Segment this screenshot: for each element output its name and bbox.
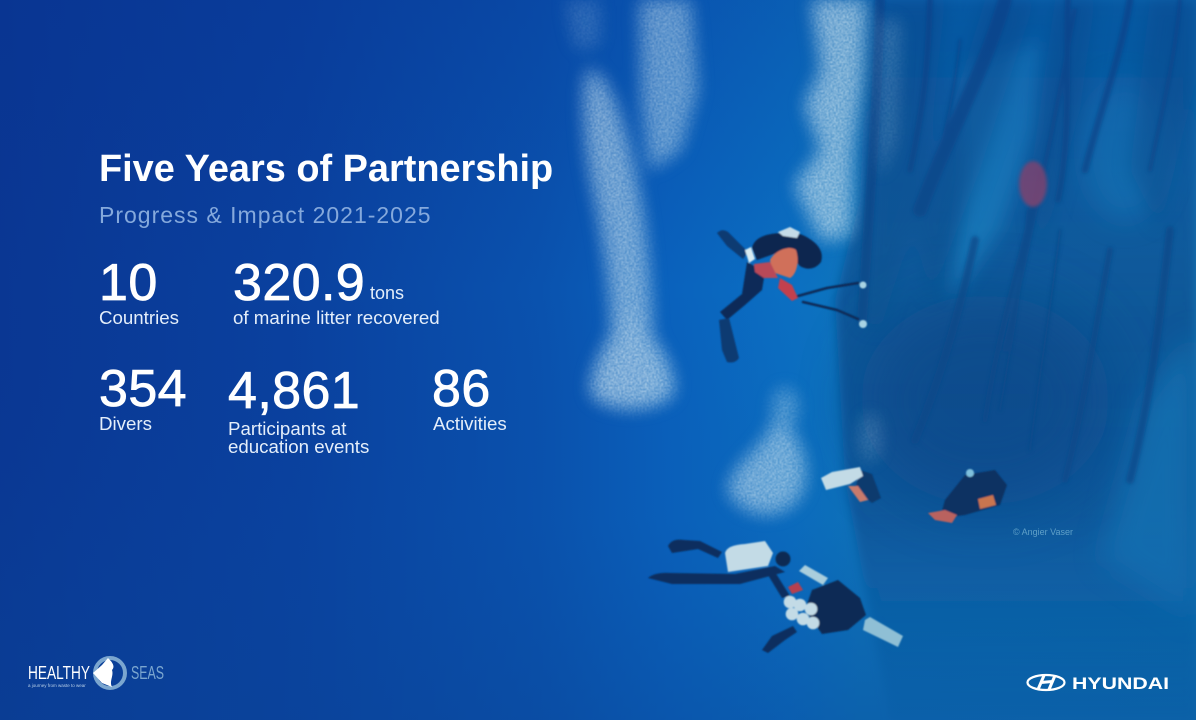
dark bands: [862, 0, 1196, 330]
net strands: [862, 0, 1180, 480]
reef wall with hanging nets: [835, 0, 1196, 720]
photo credit: © Angier Vaser: [1013, 527, 1073, 537]
stat: countries: [99, 254, 179, 328]
stat: participants: 4,861: [228, 362, 360, 420]
right diver: [940, 470, 1007, 518]
stat: participants: education events: [228, 436, 369, 456]
logo: Hyundai: [1026, 674, 1169, 693]
stat: participants: Participants at: [228, 418, 346, 439]
logo: Hyundai: HYUNDAI: [1072, 675, 1169, 693]
stat: countries: Countries: [99, 307, 179, 328]
stat: marine litter: [233, 254, 440, 328]
lower diver: [805, 580, 866, 634]
stat: divers: 354: [99, 360, 187, 418]
diver with red vest: [717, 227, 867, 362]
stat: activities: Activities: [433, 413, 507, 434]
logo: Healthy Seas: a journey from waste to wear: [28, 683, 86, 688]
subtitle: Progress & Impact 2021-2025: [99, 202, 432, 228]
stat: marine litter: 320.9: [233, 254, 365, 312]
title: Five Years of Partnership: [99, 148, 553, 190]
diver group: [648, 467, 1007, 653]
red buoy: [1019, 161, 1047, 207]
upper diver: [855, 470, 881, 503]
stat: activities: [432, 360, 507, 434]
stat: divers: Divers: [99, 413, 152, 434]
logo: Healthy Seas: [28, 656, 164, 690]
stat: participants: [228, 362, 369, 456]
bubble columns: [565, 0, 900, 514]
stat: marine litter: tons: [370, 283, 404, 303]
stat: countries: 10: [99, 254, 158, 312]
left diver: [668, 540, 722, 558]
logo: Healthy Seas: HEALTHY: [28, 663, 90, 683]
stat: activities: 86: [432, 360, 491, 418]
stat: marine litter: of marine litter recovered: [233, 307, 440, 328]
